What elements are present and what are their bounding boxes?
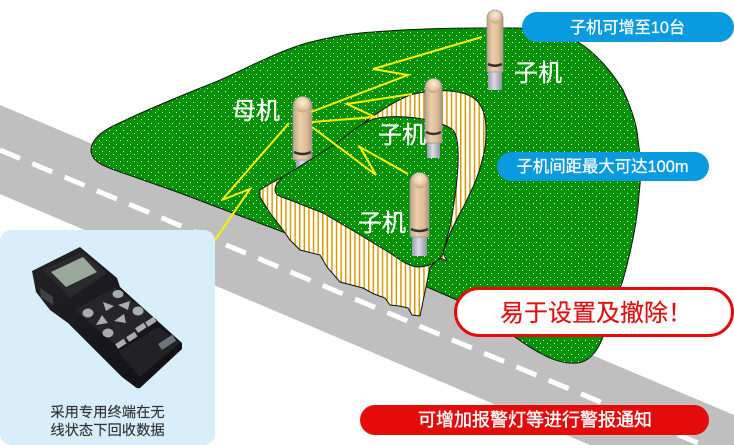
caption — [50, 404, 165, 439]
callout: spacing 100m — [497, 152, 709, 181]
callout: spacing 100m: 子机间距最大可达100m — [516, 158, 689, 176]
panel: handheld terminal — [0, 230, 215, 445]
callout: up to ten slaves — [522, 12, 734, 42]
label: slave far: 子机 — [514, 60, 562, 87]
icon: handheld terminal device — [32, 247, 182, 388]
label: slave middle: 子机 — [378, 122, 426, 149]
callout: alarm lamp — [360, 405, 709, 435]
label: master: 母机 — [232, 98, 280, 125]
hatched signal shadow area — [260, 91, 486, 316]
callout: easy install — [456, 288, 732, 336]
sensor: middle slave — [425, 78, 442, 158]
label: slave lower: 子机 — [358, 210, 406, 237]
callout: up to ten slaves: 子机可增至10台 — [570, 19, 685, 37]
radio links — [213, 37, 482, 243]
road — [0, 105, 734, 445]
sensor: master unit — [293, 96, 312, 170]
inner green signal area — [275, 117, 458, 267]
sensor: far slave — [487, 10, 503, 90]
coverage area: green field — [91, 28, 640, 363]
callout: alarm lamp: 可增加报警灯等进行警报通知 — [418, 410, 652, 430]
callout: easy install: 易于设置及撤除！ — [500, 300, 692, 327]
caption: 采用专用终端在无 — [50, 404, 165, 421]
caption: 线状态下回收数据 — [50, 422, 165, 439]
keypad — [82, 290, 157, 349]
sensor: lower slave — [410, 172, 429, 256]
